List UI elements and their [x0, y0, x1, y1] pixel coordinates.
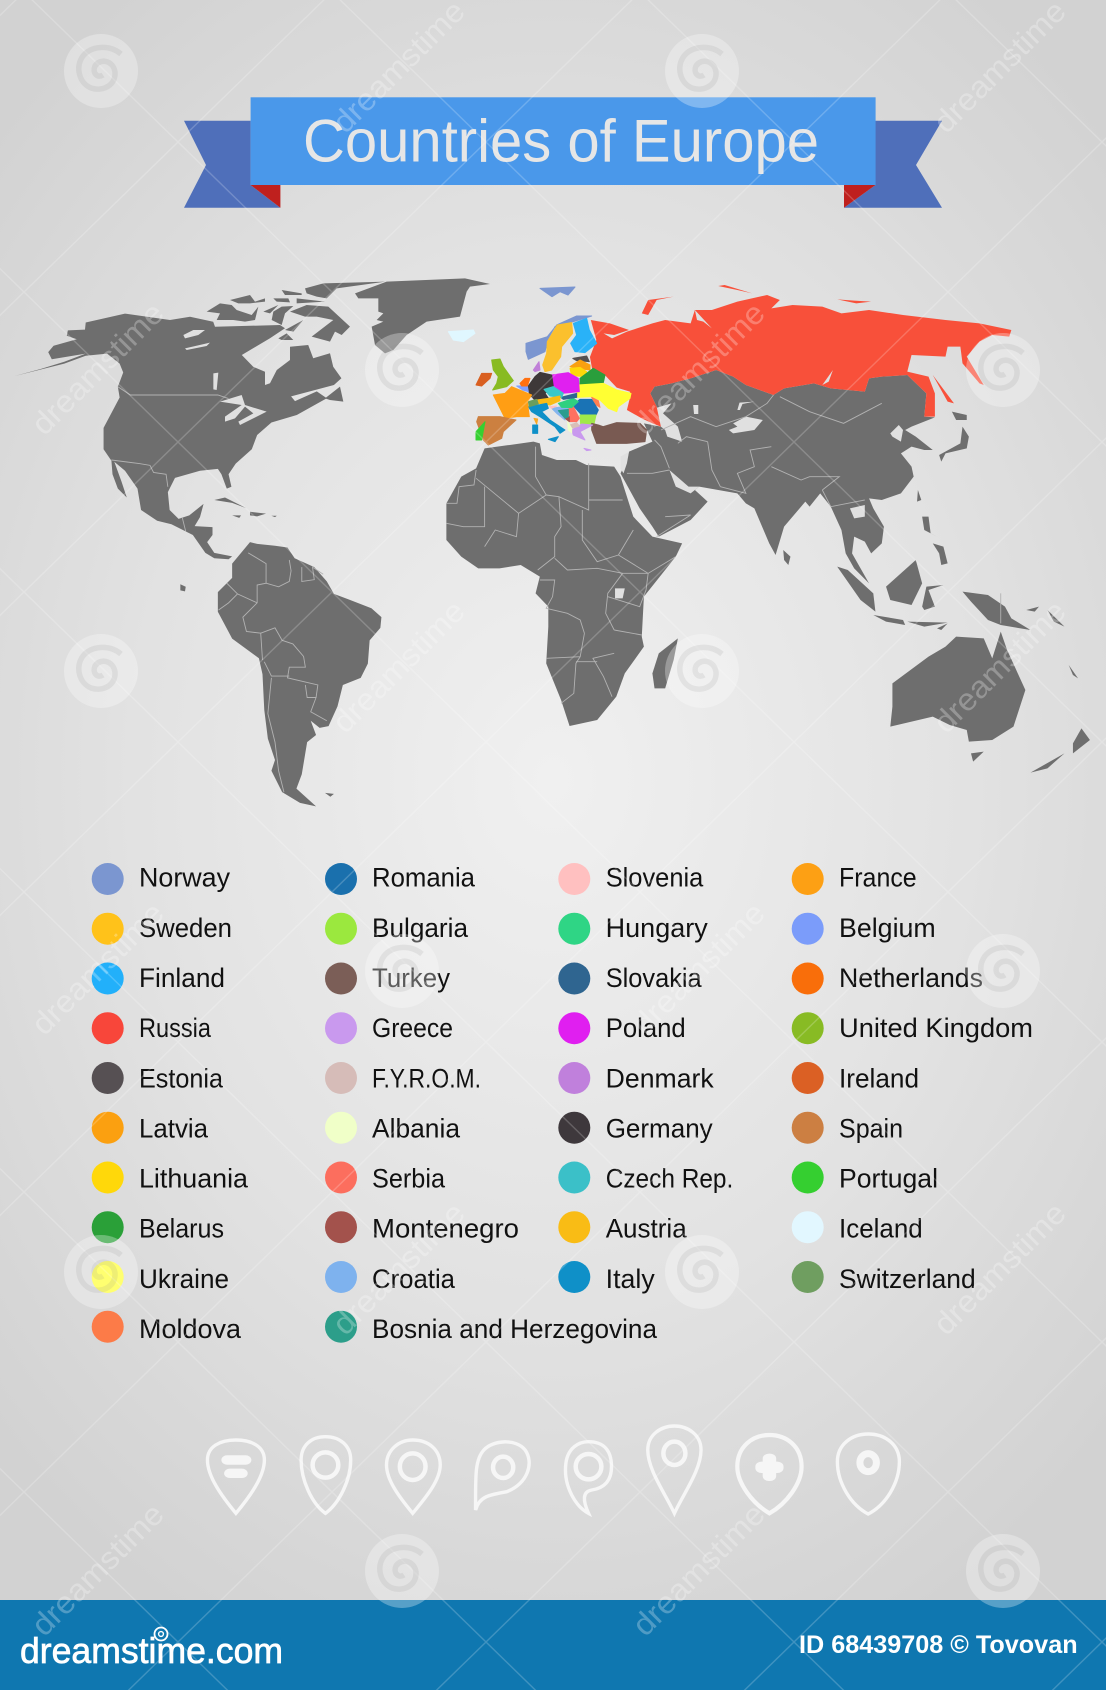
column 1 labels: Norway — [139, 863, 231, 893]
watermark text: dreamstime — [24, 1496, 171, 1643]
Europe country shapes — [448, 287, 647, 451]
column 1 labels — [139, 863, 248, 1344]
Slovakia — [561, 393, 577, 399]
watermark text: dreamstime — [625, 895, 772, 1042]
column 2 circles — [325, 863, 357, 1343]
Russia — [590, 285, 1011, 427]
column 3 labels: Denmark — [606, 1063, 714, 1093]
watermark text: dreamstime — [926, 0, 1073, 140]
Italy — [528, 403, 565, 442]
Romania — [573, 399, 598, 415]
Asia landmass — [621, 370, 935, 583]
Slovenia — [549, 406, 557, 408]
France — [493, 387, 532, 418]
column 2 labels: Romania — [372, 863, 475, 893]
watermark text: dreamstime — [24, 895, 171, 1042]
column 3 labels: Slovenia — [606, 863, 704, 893]
column 3 labels: Austria — [606, 1214, 687, 1244]
ribbon left fold — [251, 185, 280, 208]
Czech Republic — [544, 387, 563, 397]
column 2 labels — [372, 863, 657, 1344]
column 4 labels — [839, 863, 1033, 1294]
Corsica — [534, 418, 538, 424]
icon: pin with plus — [737, 1435, 802, 1513]
North America landmass — [14, 314, 341, 559]
column 4 labels: Iceland — [839, 1214, 923, 1244]
watermark text: dreamstime — [325, 593, 472, 740]
column 2 labels: Bosnia and Herzegovina — [372, 1314, 657, 1344]
world map — [14, 278, 1090, 806]
Greece — [572, 424, 593, 451]
column 1 labels: Ukraine — [139, 1264, 229, 1294]
footer bar — [0, 1600, 1106, 1690]
ribbon right tail — [844, 121, 942, 208]
watermark text: dreamstime — [325, 1195, 472, 1342]
column 3 labels — [606, 863, 733, 1294]
column 1 labels: Latvia — [139, 1113, 208, 1143]
column 2 labels: Albania — [372, 1113, 460, 1143]
column 3 labels: Germany — [606, 1113, 713, 1143]
Spain — [477, 417, 516, 445]
footer logo: dreamstime.com — [20, 1630, 283, 1671]
watermark text: dreamstime — [24, 295, 171, 442]
Belgium — [517, 386, 528, 392]
Lithuania — [570, 367, 587, 377]
icon: pin with bold ring — [837, 1434, 899, 1514]
column 2 labels: F.Y.R.O.M. — [372, 1063, 481, 1093]
Finland — [571, 318, 597, 353]
Portugal — [476, 422, 485, 440]
Germany — [527, 372, 553, 400]
column 1 labels: Russia — [139, 1013, 211, 1043]
Americas — [14, 314, 381, 806]
Ireland — [476, 373, 492, 386]
Netherlands — [520, 378, 530, 386]
Hungary — [558, 398, 578, 408]
Estonia — [573, 356, 589, 362]
Bulgaria — [580, 415, 596, 424]
Ukraine — [577, 383, 631, 412]
Denmark — [533, 362, 540, 372]
Borders in Africa and Asia — [446, 395, 1001, 703]
Albania — [568, 422, 572, 433]
watermark text: dreamstime — [926, 1195, 1073, 1342]
Caribbean and small islands — [180, 497, 334, 797]
column 2 labels: Bulgaria — [372, 913, 468, 943]
ribbon right fold — [844, 185, 876, 208]
ribbon banner — [184, 97, 942, 208]
column 4 labels: United Kingdom — [839, 1013, 1033, 1043]
column 4 labels: Switzerland — [839, 1264, 976, 1294]
column 3 circles — [558, 863, 590, 1293]
column 2 labels: Montenegro — [372, 1214, 519, 1244]
column 3 labels: Poland — [606, 1013, 686, 1043]
legend — [92, 863, 1033, 1344]
column 3 labels: Slovakia — [606, 963, 702, 993]
column 4 labels: France — [839, 863, 917, 893]
Canadian and Great Lakes — [183, 330, 267, 425]
column 1 labels: Lithuania — [139, 1164, 248, 1194]
Bosnia and Herzegovina — [558, 409, 568, 418]
watermark text: dreamstime — [625, 1496, 772, 1643]
column 4 labels: Spain — [839, 1113, 903, 1143]
Norway — [526, 287, 592, 359]
icon: tall pin — [648, 1426, 701, 1513]
icon: pin with bars — [207, 1440, 264, 1513]
Serbia — [568, 407, 579, 422]
South America — [218, 542, 381, 806]
Austria — [537, 396, 560, 405]
Moldova — [592, 397, 600, 407]
map pin icons — [207, 1426, 899, 1514]
column 1 circles — [92, 863, 124, 1343]
Greenland — [355, 278, 490, 353]
Turkey — [592, 423, 647, 443]
Belarus — [580, 368, 605, 385]
Inland seas and blank countries — [615, 402, 903, 598]
column 3 labels: Hungary — [606, 913, 708, 943]
title: Countries of Europe — [303, 108, 819, 175]
icon: round pin — [387, 1440, 440, 1513]
Montenegro — [565, 417, 569, 422]
Arctic islands — [207, 282, 385, 402]
column 4 labels: Portugal — [839, 1164, 938, 1194]
ribbon left tail — [184, 121, 280, 208]
column 1 labels: Moldova — [139, 1314, 241, 1344]
Iceland — [448, 330, 475, 342]
footer image id: ID 68439708 © Tovovan — [799, 1631, 1078, 1659]
column 3 labels: Italy — [606, 1264, 655, 1294]
column 4 circles — [792, 863, 824, 1293]
Arctic Canada and Greenland — [183, 278, 490, 425]
column 4 labels: Netherlands — [839, 963, 983, 993]
Africa landmass — [446, 442, 682, 726]
ribbon main band — [251, 97, 876, 185]
column 3 labels: Czech Rep. — [606, 1164, 733, 1194]
column 1 labels: Belarus — [139, 1214, 224, 1244]
Croatia — [552, 406, 568, 420]
icon: speech pin — [476, 1442, 529, 1510]
Poland — [552, 373, 579, 393]
column 1 labels: Finland — [139, 963, 225, 993]
Borders in the Americas — [111, 387, 327, 792]
icon: narrow pin — [301, 1437, 351, 1513]
icon: curved pin — [565, 1442, 611, 1513]
United Kingdom — [492, 359, 513, 390]
Sweden — [543, 323, 573, 372]
F.Y.R.O.M. — [570, 423, 579, 428]
Switzerland — [528, 399, 538, 407]
column 4 labels: Ireland — [839, 1063, 919, 1093]
column 2 labels: Serbia — [372, 1164, 445, 1194]
watermark text: dreamstime — [625, 295, 772, 442]
column 1 labels: Sweden — [139, 913, 232, 943]
Latvia — [570, 360, 590, 370]
column 2 labels: Greece — [372, 1013, 453, 1043]
column 2 labels: Turkey — [372, 963, 451, 993]
watermark text: dreamstime — [325, 0, 472, 140]
column 4 labels: Belgium — [839, 913, 936, 943]
column 1 labels: Estonia — [139, 1063, 223, 1093]
Islands of Asia and Oceania — [652, 412, 1090, 773]
Africa, Asia and Oceania — [446, 285, 1090, 773]
watermark text: dreamstime — [926, 593, 1073, 740]
column 2 labels: Croatia — [372, 1264, 455, 1294]
